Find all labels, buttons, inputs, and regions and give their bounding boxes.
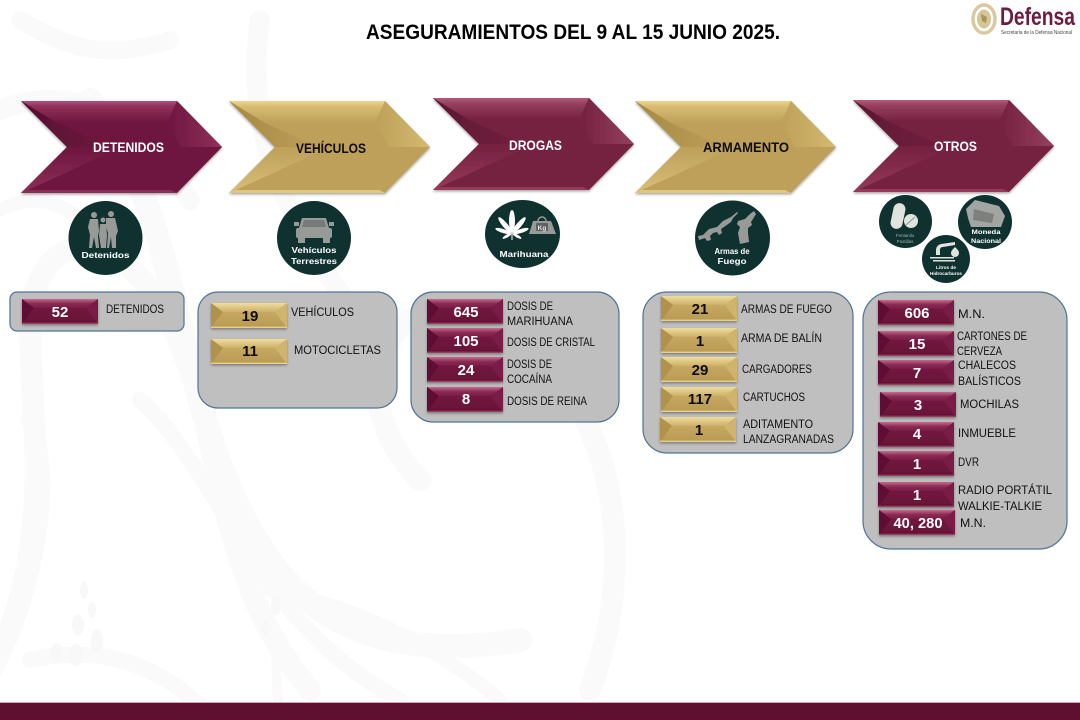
chevron: otros	[853, 100, 1054, 192]
panel: armamento: ADITAMENTO	[743, 419, 813, 431]
footer bar	[0, 702, 1080, 720]
panel: drogas: COCAÍNA	[507, 373, 552, 386]
panel: otros: 40, 280	[894, 515, 942, 532]
chevron: vehículos: VEHÍCULOS	[296, 141, 366, 156]
panel: drogas: DOSIS DE	[507, 301, 553, 313]
panel: otros	[863, 292, 1067, 549]
panel: armamento: LANZAGRANADAS	[743, 434, 834, 446]
chevron: otros: OTROS	[934, 139, 977, 154]
chevron: drogas	[433, 98, 634, 190]
panel: vehículos: 19	[242, 308, 258, 325]
icon: armas de fuego	[695, 200, 770, 276]
panel: drogas: 8	[462, 391, 470, 408]
icon: litros de hidrocarburos: Hidrocarburos	[930, 271, 963, 276]
panel: otros: M.N.	[960, 518, 986, 530]
panel: armamento: 1	[696, 333, 704, 350]
icon: vehículos terrestres: Vehículos	[292, 246, 337, 255]
panel: otros: RADIO PORTÁTIL	[958, 484, 1053, 497]
panel: drogas: MARIHUANA	[507, 316, 573, 328]
chevron: detenidos: DETENIDOS	[93, 140, 164, 155]
chevron: drogas: DROGAS	[509, 138, 562, 153]
panel: armamento: 21	[692, 301, 708, 318]
icon: moneda nacional: Moneda	[972, 230, 1001, 236]
panel: detenidos: 52	[52, 304, 68, 321]
icon: marihuana	[485, 200, 560, 268]
panel: detenidos: DETENIDOS	[106, 304, 164, 316]
panel: otros: MOCHILAS	[960, 399, 1019, 411]
icon: armas de fuego: Fuego	[718, 257, 747, 266]
panel: vehículos: 11	[242, 343, 258, 360]
panel: vehículos	[198, 292, 397, 408]
icon: vehículos terrestres	[277, 201, 351, 275]
panel: drogas: DOSIS DE CRISTAL	[507, 337, 595, 349]
chevron: detenidos	[21, 101, 222, 193]
icon: fentanilo pastillas: Pastillas	[897, 239, 914, 244]
icon: detenidos	[68, 201, 142, 275]
panel: armamento: ARMAS DE FUEGO	[741, 304, 832, 316]
panel: armamento	[643, 292, 853, 453]
icon: marihuana: Marihuana	[500, 249, 549, 259]
panel: otros: BALÍSTICOS	[958, 375, 1021, 388]
icon: litros de hidrocarburos: Litros de	[936, 265, 957, 270]
panel: otros: 4	[913, 426, 922, 443]
panel: otros: CHALECOS	[958, 360, 1016, 372]
panel: drogas: 645	[453, 304, 479, 321]
icon: marihuana: Kg	[538, 225, 546, 232]
chevron: armamento: ARMAMENTO	[703, 140, 789, 155]
panel: otros: INMUEBLE	[958, 428, 1016, 440]
panel: otros: CARTONES DE	[957, 331, 1027, 343]
panel: drogas: 24	[458, 362, 475, 379]
panel: otros: 15	[909, 336, 925, 353]
panel: armamento: 29	[692, 362, 708, 379]
icon: moneda nacional: Nacional	[971, 239, 1001, 245]
icon: detenidos: Detenidos	[82, 250, 130, 260]
icon: moneda nacional	[958, 195, 1012, 249]
panel: otros: M.N.	[958, 309, 985, 321]
logo: Defensa	[973, 3, 1076, 36]
icon: fentanilo pastillas	[879, 195, 932, 248]
panel: armamento: CARTUCHOS	[743, 392, 805, 404]
panel: otros: 3	[914, 397, 922, 414]
panel: drogas	[411, 292, 619, 422]
panel: armamento: 117	[688, 391, 712, 408]
panel: otros: 7	[913, 365, 921, 382]
icon: litros de hidrocarburos	[922, 235, 970, 283]
panel: armamento: 1	[695, 422, 703, 439]
panel: otros: CERVEZA	[957, 346, 1002, 358]
panel: drogas: DOSIS DE	[507, 359, 552, 371]
panel: drogas: 105	[453, 333, 479, 350]
chevron: vehículos	[229, 101, 430, 193]
icon: vehículos terrestres: Terrestres	[291, 257, 338, 266]
panel: otros: DVR	[958, 457, 979, 469]
panel: vehículos: MOTOCICLETAS	[294, 345, 381, 357]
panel: vehículos: VEHÍCULOS	[291, 306, 354, 319]
panel: otros: WALKIE-TALKIE	[958, 501, 1042, 513]
panel: otros: 1	[913, 456, 921, 473]
chevron: armamento	[635, 101, 836, 193]
icon: fentanilo pastillas: Fentanilo	[896, 233, 915, 238]
panel: armamento: CARGADORES	[742, 364, 812, 376]
icon: armas de fuego: Armas de	[714, 247, 750, 256]
panel: drogas: DOSIS DE REINA	[507, 396, 587, 408]
panel: detenidos	[10, 292, 184, 331]
panel: armamento: ARMA DE BALÍN	[741, 332, 822, 345]
title: ASEGURAMIENTOS DEL 9 AL 15 JUNIO 2025.	[366, 21, 780, 44]
panel: otros: 1	[913, 487, 921, 504]
panel: otros: 606	[904, 305, 930, 322]
